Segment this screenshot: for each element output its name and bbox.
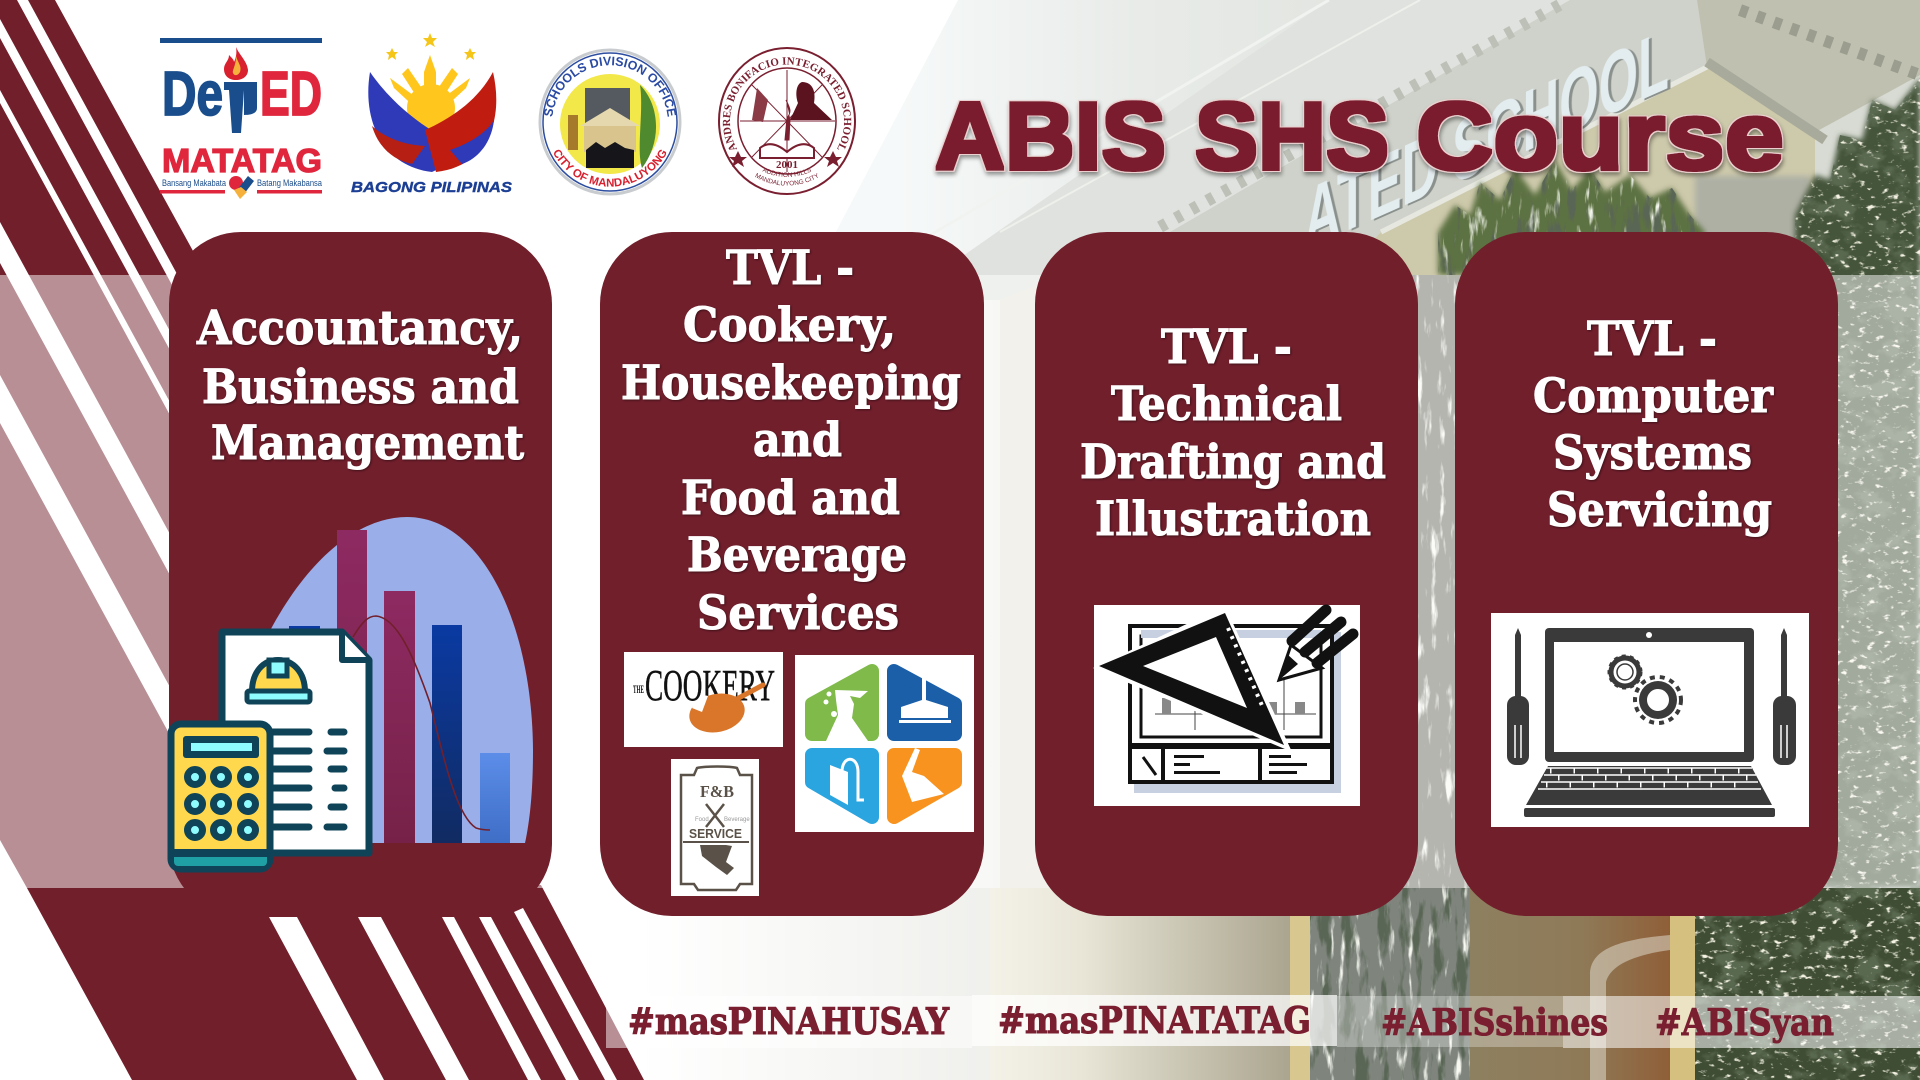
logo: Bagong Pilipinas [351, 33, 512, 196]
logo: DepEd Matatag: Batang Makabansa [257, 178, 322, 188]
image: The Cookery logo: THE [633, 682, 644, 696]
heading: ABM: Management [211, 416, 524, 471]
logo: Schools Division Office seal: CITY OF MANDALUYONG [554, 150, 666, 187]
heading: ABM [196, 301, 524, 471]
logo: DepEd Matatag [160, 38, 322, 199]
heading: TVL cookery: Housekeeping [621, 356, 961, 411]
logo: DepEd Matatag: MATATAG [162, 142, 322, 179]
heading: TVL drafting: Drafting and [1080, 435, 1386, 490]
heading: TVL computer: Systems [1553, 426, 1752, 481]
image: F&B service logo: Food [695, 817, 709, 823]
image: F&B service logo: F&B [700, 782, 734, 801]
panel: TVL Cookery, Housekeeping, Food and Beverage [600, 232, 984, 916]
white diagonal stripes: left side [0, 0, 220, 827]
icon: calculator [171, 724, 270, 869]
heading: TVL cookery: Cookery, [683, 298, 896, 353]
white diagonal stripes: bottom [269, 908, 617, 1080]
hashtag band backgrounds [606, 995, 1920, 1048]
panel: TVL Technical Drafting and Illustration [1035, 232, 1418, 916]
title [935, 83, 1784, 190]
heading: TVL cookery [621, 241, 961, 641]
panel: Accountancy, Business and Management [169, 232, 552, 916]
hashtag: masPINAHUSAY: #masPINAHUSAY [628, 1001, 950, 1043]
logo: Andres Bonifacio Integrated School seal [718, 47, 856, 195]
heading: TVL drafting: Illustration [1095, 492, 1371, 547]
panel: TVL Computer Systems Servicing [1455, 232, 1838, 916]
heading: TVL cookery: TVL - [726, 241, 854, 296]
heading: TVL computer: TVL - [1587, 312, 1717, 367]
heading: TVL computer: Computer [1533, 369, 1774, 424]
logo: DepEd Matatag: Bansang Makabata [162, 178, 226, 188]
heading: TVL cookery: Food and [681, 471, 900, 526]
logo: Schools Division Office seal: SCHOOLS DIVISION OFFICE [544, 56, 676, 117]
image: F&B service logo [671, 759, 759, 896]
title: ABIS [935, 83, 1166, 190]
logo: Andres Bonifacio Integrated School seal: 2001 [776, 159, 798, 171]
translucent white band [0, 275, 1920, 888]
logo: DepEd Matatag: De [162, 60, 223, 129]
heading: TVL computer: Servicing [1547, 483, 1772, 538]
logo: Andres Bonifacio Integrated School seal: ADDITION HILLS [762, 168, 811, 177]
hashtag: ABISshines: #ABISshines [1381, 1002, 1608, 1044]
heading: TVL drafting: Technical [1111, 377, 1342, 432]
logo: Bagong Pilipinas: BAGONG PILIPINAS [351, 179, 512, 196]
heading: TVL computer [1533, 312, 1774, 538]
image: F&B service logo: Beverage [724, 817, 750, 823]
heading: TVL drafting: TVL - [1161, 320, 1292, 375]
title: Course [1416, 83, 1784, 190]
maroon chevron shape with diagonal edges [0, 0, 644, 1080]
heading: ABM: Business and [202, 360, 519, 415]
image: The Cookery logo: COOKERY [645, 661, 775, 710]
image: The Cookery logo [624, 652, 783, 747]
background: school building photo [792, 0, 1920, 1080]
title: SHS [1195, 83, 1389, 190]
icon: document with helmet [222, 632, 369, 853]
logo: Andres Bonifacio Integrated School seal: ANDRES BONIFACIO INTEGRATED SCHOOL [722, 57, 852, 150]
image: cleaning services logo [795, 655, 974, 832]
image: laptop with gears and screwdrivers [1491, 613, 1809, 827]
hashtag: masPINATATAG: #masPINATATAG [998, 1000, 1311, 1042]
heading: ABM: Accountancy, [196, 301, 523, 356]
image: drafting board with set square and pencil [1093, 605, 1360, 806]
image: F&B service logo: SERVICE [689, 826, 742, 841]
icon: bar chart with blob and curve [240, 517, 533, 843]
logo: Andres Bonifacio Integrated School seal: MANDALUYONG CITY [755, 173, 818, 186]
hashtag: ABISyan: #ABISyan [1655, 1002, 1834, 1044]
heading: TVL cookery: Services [697, 586, 899, 641]
logo: DepEd Matatag: ED [260, 60, 322, 129]
heading: TVL cookery: and [753, 413, 842, 468]
heading: TVL drafting [1080, 320, 1386, 547]
logo: Schools Division Office seal [538, 48, 682, 196]
heading: TVL cookery: Beverage [687, 528, 907, 583]
